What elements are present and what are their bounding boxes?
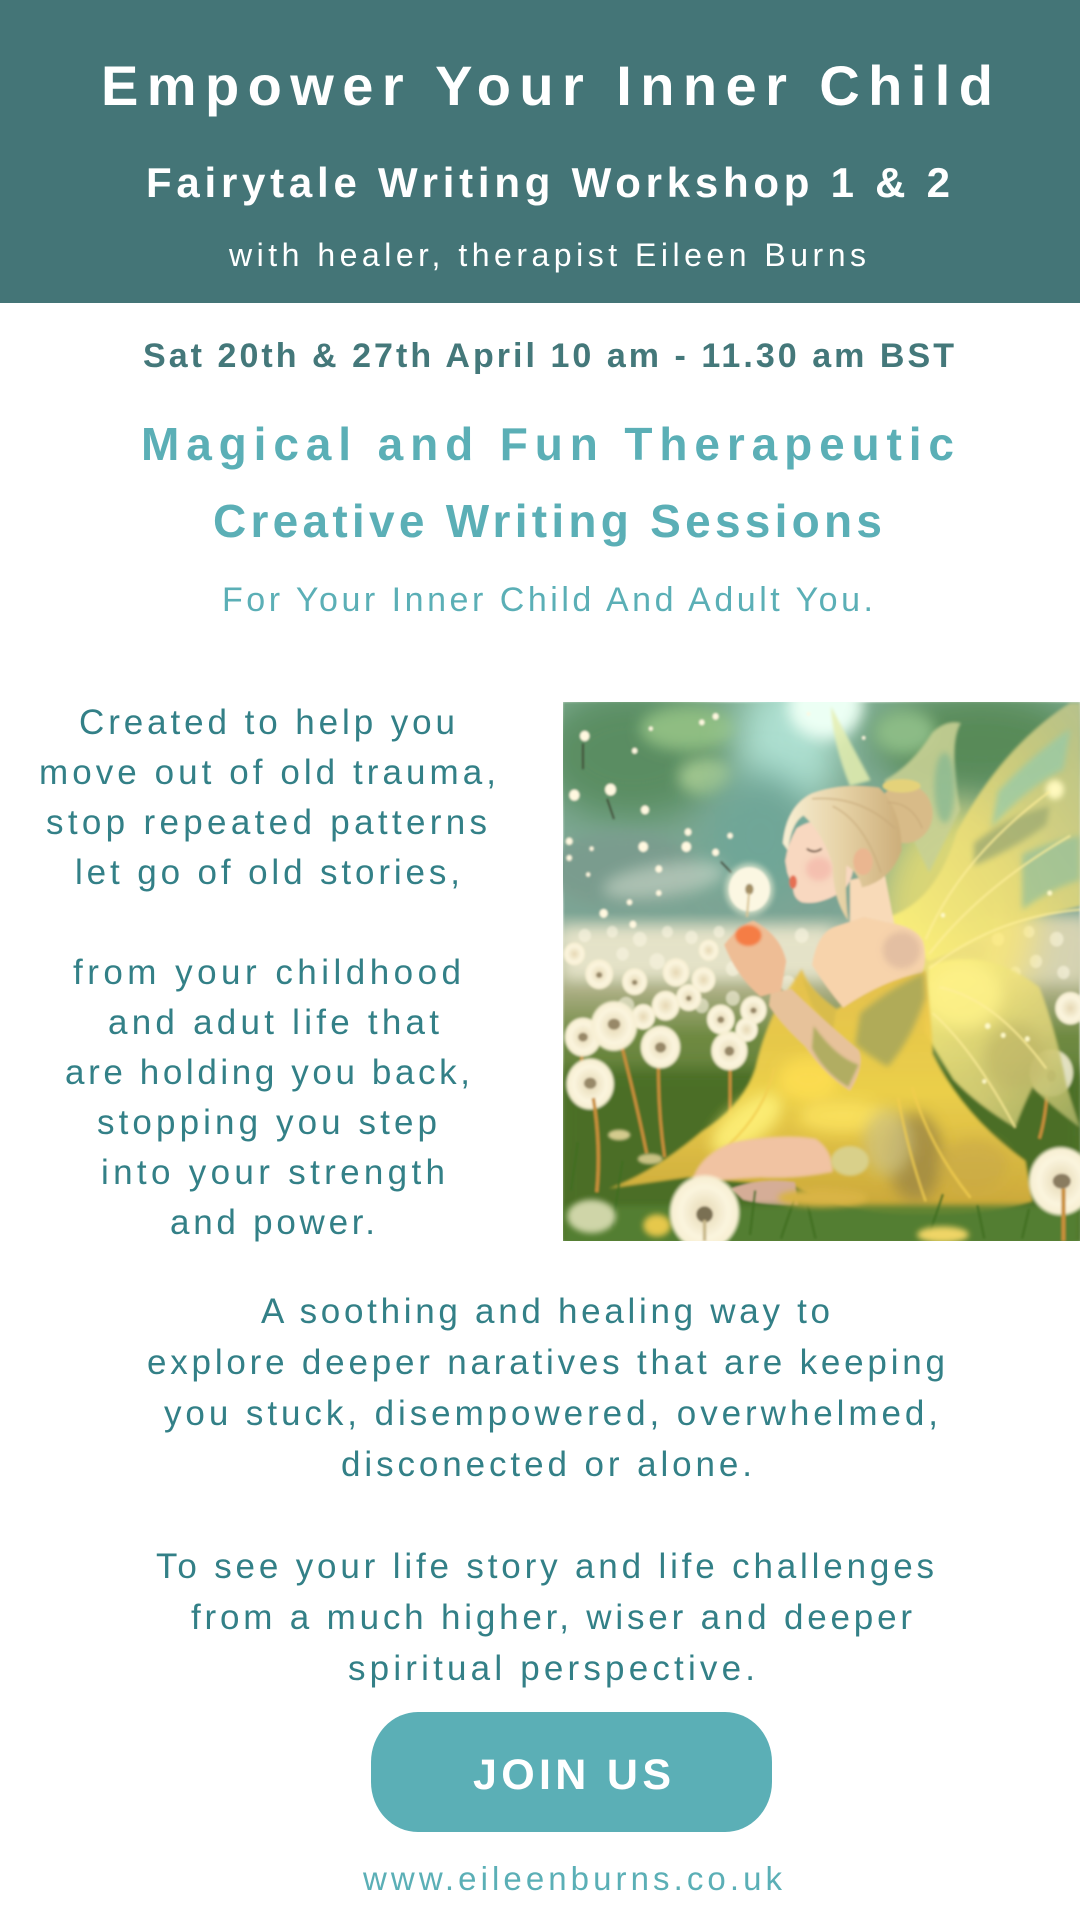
meadow of dandelions: [561, 917, 1080, 1246]
left text block: move out of old trauma,: [39, 753, 496, 792]
legs: [693, 1137, 833, 1183]
left text block: and power.: [170, 1203, 375, 1242]
left text block: stop repeated patterns: [46, 803, 487, 842]
lower text block: A soothing and healing way to: [261, 1292, 830, 1331]
title: Empower Your Inner Child: [101, 54, 993, 117]
left text block: are holding you back,: [65, 1053, 470, 1092]
left text block: into your strength: [101, 1153, 445, 1192]
forest background: [563, 702, 1080, 900]
left text block: stopping you step: [97, 1103, 437, 1142]
lower text block: disconected or alone.: [341, 1445, 752, 1484]
fairy illustration: [563, 702, 1080, 1241]
left text block: let go of old stories,: [75, 853, 460, 892]
date and time: Sat 20th & 27th April 10 am - 11.30 am BST: [143, 337, 954, 375]
left text block: from your childhood: [73, 953, 461, 992]
fairy figure: [609, 779, 1032, 1215]
dress: [609, 969, 1032, 1215]
lower text block: from a much higher, wiser and deeper: [191, 1598, 912, 1637]
header banner: [0, 0, 1080, 303]
torso: [848, 876, 895, 924]
lower text block: [147, 1292, 945, 1688]
lower text block: spiritual perspective.: [348, 1649, 755, 1688]
head: [785, 821, 854, 903]
website address: www.eileenburns.co.uk: [362, 1860, 782, 1897]
main heading: [141, 418, 954, 547]
lower text block: explore deeper naratives that are keeping: [147, 1343, 945, 1382]
subtitle: Fairytale Writing Workshop 1 & 2: [146, 159, 950, 206]
presenter line: with healer, therapist Eileen Burns: [228, 237, 866, 273]
hair: [884, 788, 933, 844]
sleeve lace: [855, 972, 925, 1067]
left text block: [39, 703, 496, 1242]
join us button: JOIN US: [473, 1751, 671, 1799]
hands: [724, 921, 786, 996]
left text block: Created to help you: [79, 703, 455, 742]
lower text block: you stuck, disempowered, overwhelmed,: [164, 1394, 938, 1433]
tagline: For Your Inner Child And Adult You.: [222, 581, 873, 619]
fairy wings: [831, 703, 1080, 1128]
held dandelion: [725, 863, 773, 917]
join us button: [371, 1712, 772, 1832]
blown seed cloud: [566, 712, 865, 928]
main heading: Creative Writing Sessions: [213, 495, 882, 547]
lower text block: To see your life story and life challenges: [156, 1547, 934, 1586]
foreground flowers and grass: [563, 1098, 1080, 1251]
left text block: and adut life that: [108, 1003, 439, 1042]
background dandelions: [563, 939, 1080, 1157]
main heading: Magical and Fun Therapeutic: [141, 418, 954, 470]
arm: [769, 989, 861, 1091]
